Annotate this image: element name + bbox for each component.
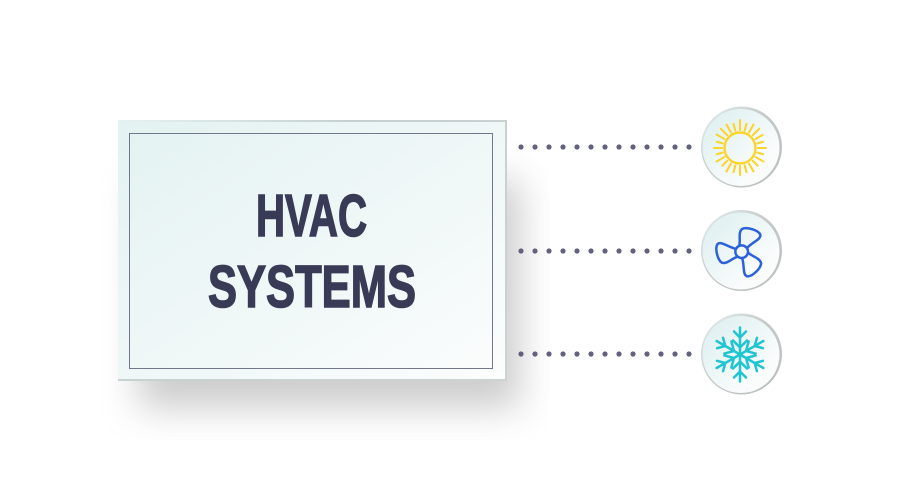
heading [208, 183, 416, 320]
dotted connector: heating [518, 144, 692, 150]
infographic: HVAC systems [118, 106, 782, 426]
heading: HVAC [256, 183, 367, 249]
icon: fan [701, 210, 782, 291]
heading: SYSTEMS [208, 254, 416, 320]
card shadow [138, 180, 520, 408]
panel: HVAC systems card [118, 120, 507, 381]
dotted connector: cooling [518, 351, 692, 357]
dotted connector: ventilation [518, 248, 692, 254]
icon: sun [701, 106, 782, 188]
icon: snowflake [701, 314, 782, 394]
